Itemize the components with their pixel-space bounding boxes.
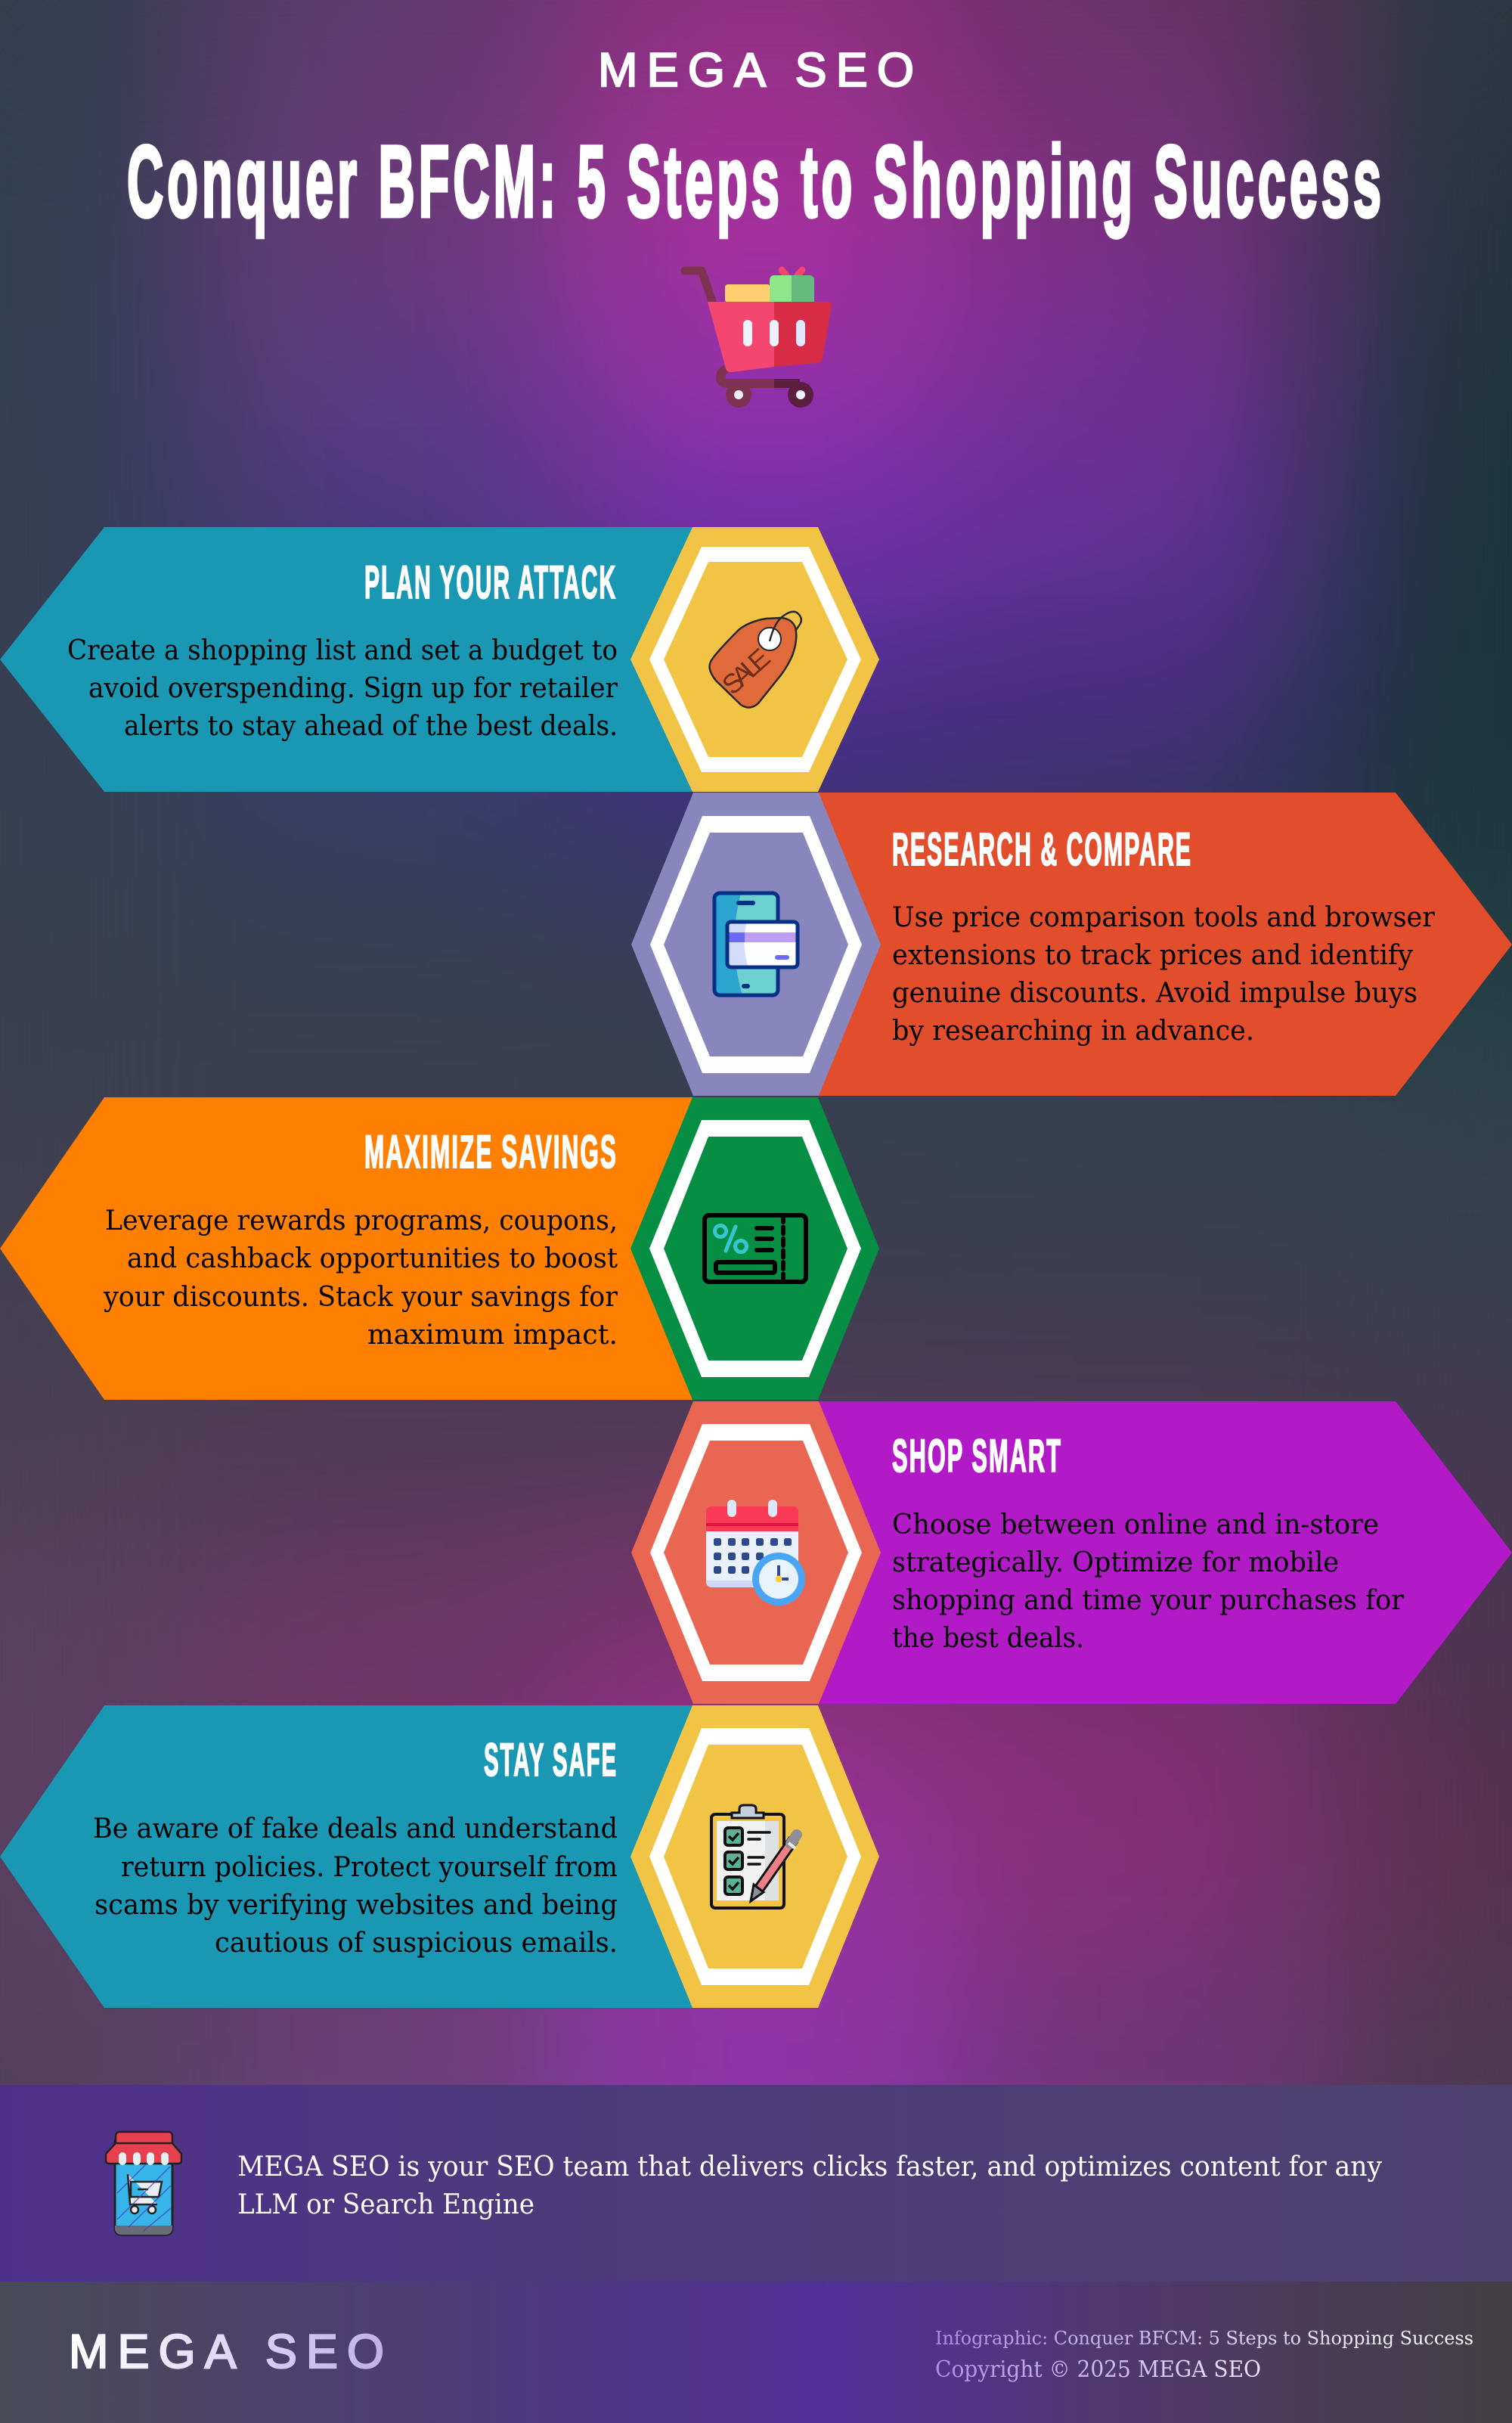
- text block: step 1 body: avoid overspending. Sign up for retailer: [88, 673, 618, 704]
- text block: footer credits: Copyright © 2025 MEGA SEO: [935, 2356, 1261, 2383]
- text block: step 2 body: extensions to track prices and identify: [892, 940, 1414, 971]
- panel: step 5 stay safe: STAY SAFE: [484, 1734, 618, 1785]
- heading: maximize savings: MAXIMIZE SAVINGS: [364, 1126, 618, 1177]
- panel: step 1 plan your attack: [0, 527, 879, 792]
- text block: promo copy: LLM or Search Engine: [237, 2189, 534, 2220]
- panel: step 2 research and compare: RESEARCH & COMPARE: [892, 824, 1192, 875]
- icon: calendar and clock: [706, 1500, 805, 1606]
- text block: step 5 body: Be aware of fake deals and understand: [93, 1813, 618, 1844]
- panel: footer: [0, 2282, 1512, 2423]
- text block: step 5 body: cautious of suspicious emails.: [215, 1928, 618, 1959]
- icon: phone and credit card: [714, 893, 798, 995]
- icon: clipboard checklist and pencil: [711, 1805, 797, 1908]
- text block: promo copy: MEGA SEO is your SEO team that delivers clicks faster, and optimizes content for any: [237, 2152, 1383, 2183]
- icon: discount ticket: [705, 1215, 806, 1282]
- panel: step 5 stay safe: [0, 1705, 879, 2008]
- hexagon: step 5: [631, 1705, 879, 2008]
- text block: step 1 body: alerts to stay ahead of the best deals.: [124, 711, 618, 742]
- hexagon: step 1: [631, 527, 879, 792]
- panel: step 3 maximize savings: [0, 1097, 879, 1400]
- text block: step 2 body: by researching in advance.: [892, 1016, 1254, 1047]
- panel: promo band: [0, 2085, 1512, 2282]
- text block: step 1 body: [67, 635, 618, 742]
- text block: step 4 body: strategically. Optimize for mobile: [892, 1547, 1339, 1578]
- text block: step 4 body: shopping and time your purchases for: [892, 1585, 1405, 1616]
- brand logo footer: MEGA SEO: [69, 2325, 384, 2378]
- icon: shopping cart: [685, 270, 832, 408]
- panel: step 2 research and compare: [631, 793, 1512, 1096]
- text block: step 3 body: Leverage rewards programs, coupons,: [105, 1205, 618, 1236]
- panel: step 1 plan your attack: PLAN YOUR ATTACK: [364, 557, 617, 608]
- text block: step 4 body: the best deals.: [892, 1623, 1084, 1654]
- text block: step 3 body: maximum impact.: [367, 1320, 618, 1351]
- icon: mobile store: [106, 2132, 181, 2235]
- text block: step 5 body: return policies. Protect yourself from: [121, 1852, 618, 1883]
- text block: step 3 body: your discounts. Stack your savings for: [103, 1282, 618, 1313]
- brand logo top: MEGA SEO: [598, 44, 914, 97]
- text block: step 5 body: scams by verifying websites and being: [94, 1890, 618, 1921]
- text block: step 3 body: [103, 1205, 618, 1351]
- hexagon: step 4: [631, 1401, 881, 1704]
- text block: step 5 body: [93, 1813, 618, 1959]
- icon: sale tag: [710, 612, 801, 708]
- hexagon: step 3: [631, 1097, 879, 1400]
- text block: promo copy: [237, 2152, 1383, 2220]
- text block: step 4 body: Choose between online and in-store: [892, 1509, 1379, 1540]
- text block: step 2 body: genuine discounts. Avoid impulse buys: [892, 978, 1418, 1009]
- hexagon: step 2: [631, 793, 881, 1096]
- heading: shop smart: SHOP SMART: [892, 1430, 1062, 1481]
- text block: footer credits: [935, 2328, 1473, 2383]
- text block: step 3 body: and cashback opportunities to boost: [127, 1243, 618, 1274]
- text block: step 1 body: Create a shopping list and set a budget to: [67, 635, 618, 666]
- text block: footer credits: Infographic: Conquer BFCM: 5 Steps to Shopping Success: [935, 2328, 1473, 2349]
- icon: sale tag: SALE: [716, 642, 776, 700]
- text block: step 2 body: [892, 902, 1436, 1047]
- panel: step 4 shop smart: [631, 1401, 1512, 1704]
- text block: step 2 body: Use price comparison tools and browser: [892, 902, 1436, 933]
- text block: step 4 body: [892, 1509, 1405, 1654]
